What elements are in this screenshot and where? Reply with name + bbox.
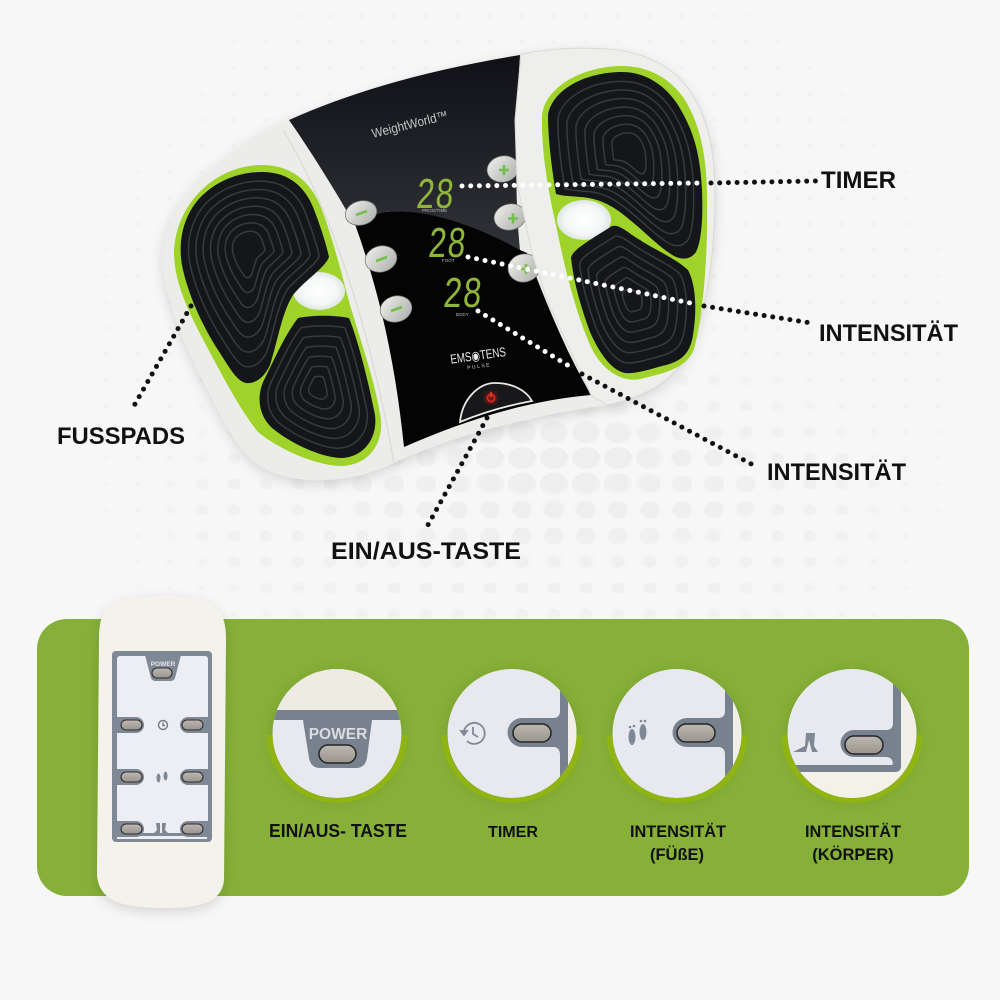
callout circle: timer: [442, 665, 582, 805]
display: body: BODY: [456, 312, 469, 317]
label: intensity feet: INTENSITÄT: [630, 823, 726, 841]
background halftone dots: [429, 404, 681, 515]
remote body: [97, 596, 226, 908]
display: program time: 28: [414, 172, 456, 222]
remote key panel: POWER: [151, 661, 176, 668]
control panel upper: [289, 55, 520, 250]
inner seam of housing: [283, 130, 394, 463]
icon: legs: [793, 733, 818, 752]
icon: red power symbol: [485, 392, 497, 404]
right wing housing: [515, 48, 715, 405]
label: foot pads: FUSSPADS: [57, 423, 185, 450]
EMS TENS logo: EMS◉TENS: [449, 344, 507, 367]
callout line: intensity foot: [468, 257, 811, 323]
label: intensity feet: [630, 823, 726, 864]
icon: feet: [628, 720, 646, 745]
display: foot: 28: [426, 221, 468, 271]
display: body: 28: [441, 271, 484, 321]
icon: clock: [158, 720, 168, 730]
label: intensity feet: (FÜßE): [650, 845, 704, 864]
label: intensity top: INTENSITÄT: [819, 320, 958, 347]
control panel lower: [356, 211, 591, 447]
plus buttons: [485, 153, 543, 285]
WeightWorld logo: WeightWorld™: [370, 107, 449, 141]
callout line: timer: [462, 181, 816, 186]
EMS TENS logo: [449, 344, 507, 371]
label: intensity body: [805, 823, 901, 864]
light right: [557, 200, 611, 240]
device white housing: [162, 48, 715, 480]
minus buttons: [342, 197, 415, 326]
icon: clock: [461, 723, 485, 744]
green ring left: [174, 165, 381, 466]
lower black pad left: [260, 316, 375, 458]
label: power button: EIN/AUS-TASTE: [331, 538, 521, 565]
callout line: foot pads: [131, 306, 191, 411]
callout circle: power: POWER: [309, 726, 367, 743]
label: intensity lower: INTENSITÄT: [767, 459, 906, 486]
remote key panel: [112, 651, 212, 842]
display: program time: PROG/TIME: [422, 208, 447, 213]
label: power remote: EIN/AUS- TASTE: [269, 821, 407, 841]
green ring right: [542, 66, 707, 380]
EMS TENS logo: PULSE: [467, 362, 491, 371]
callout circle: intensity body: [782, 665, 922, 803]
label: intensity body: (KÖRPER): [812, 845, 894, 864]
right foot pad: [542, 66, 707, 380]
callout circle: power: [266, 665, 408, 803]
callout circle: intensity feet: [606, 665, 748, 805]
display: foot: FOOT: [442, 258, 455, 263]
icon: feet: [156, 772, 168, 782]
lower black pad right: [571, 226, 695, 373]
power button arch: [460, 383, 532, 422]
icon: legs: [154, 823, 168, 833]
light left: [293, 272, 345, 310]
remote control: [97, 596, 226, 908]
label: timer remote: TIMER: [488, 824, 538, 841]
upper black pad left: [181, 172, 329, 383]
left foot pad: [174, 165, 381, 466]
panel: green remote functions: [37, 619, 969, 896]
label: timer: TIMER: [821, 167, 896, 194]
callout line: intensity body: [478, 311, 755, 466]
label: intensity body: INTENSITÄT: [805, 823, 901, 841]
upper black pad right: [548, 72, 702, 259]
foot massager device: [162, 48, 715, 480]
callout line: power button: [428, 418, 487, 525]
